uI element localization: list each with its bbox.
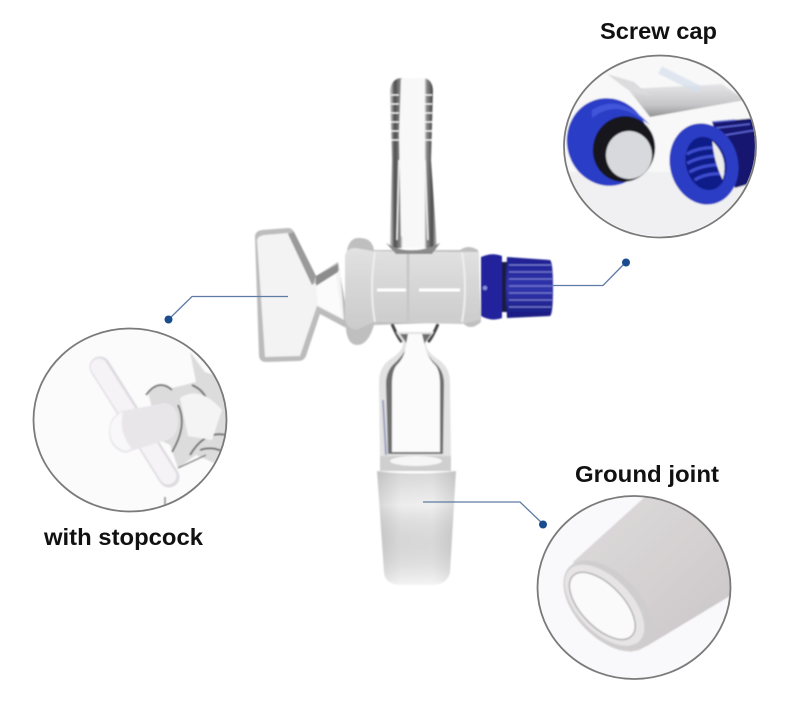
- frosted ground joint: [377, 471, 456, 585]
- detail circle: screw cap: [557, 50, 760, 240]
- callout line: stopcock handle: [164, 296, 288, 324]
- handle of glass key: [255, 228, 350, 362]
- product: glass stopcock adapter: [255, 78, 553, 585]
- lower neck and bulb: [379, 332, 451, 471]
- label: Ground joint: Ground joint: [575, 461, 719, 487]
- label: Screw cap: Screw cap: [600, 18, 717, 44]
- label: with stopcock: with stopcock: [43, 524, 203, 550]
- glass behind the stopcock: [146, 352, 230, 512]
- top hose barb tube: [390, 78, 437, 248]
- white hub: [109, 403, 178, 453]
- callout line: screw cap: [553, 258, 630, 286]
- right blue ribbed cap: [668, 118, 755, 206]
- stopcock barrel: [345, 238, 481, 345]
- white handle: [100, 367, 169, 477]
- detail circle: ground joint: [535, 490, 740, 684]
- blue collar and ribbed screw cap: [481, 254, 553, 320]
- left blue ring with black gasket: [566, 97, 656, 187]
- detail circle: PTFE stopcock: [30, 325, 230, 515]
- callout line: ground joint: [423, 502, 547, 528]
